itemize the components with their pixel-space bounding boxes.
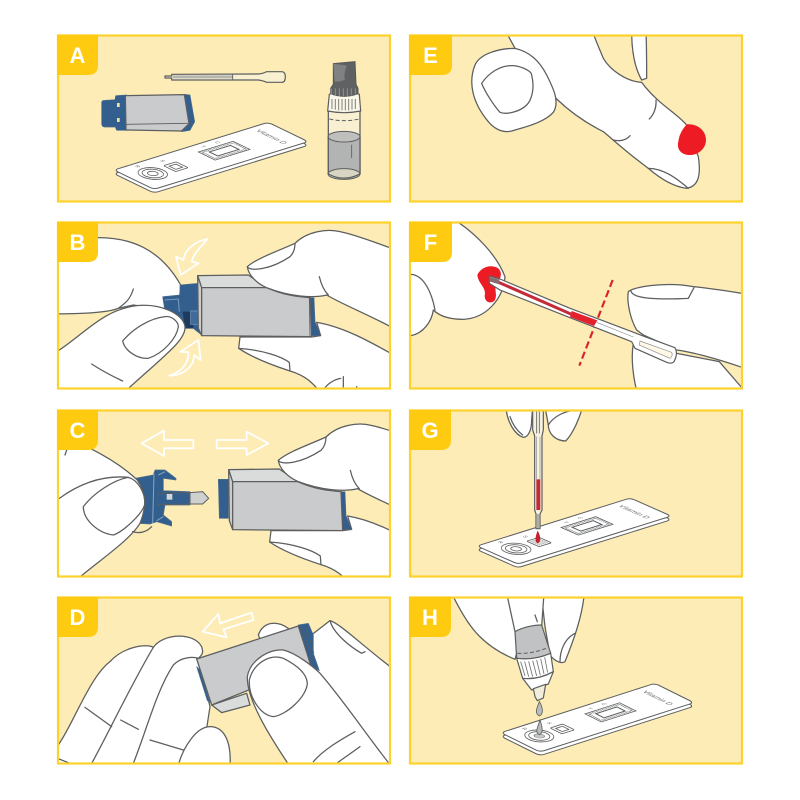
lancet body with port <box>218 469 352 531</box>
panel F: collect blood with pipette <box>408 221 744 390</box>
arrow: left <box>142 431 193 456</box>
panel H: add buffer drops <box>409 593 742 764</box>
back finger <box>258 622 289 638</box>
badge G: G <box>421 418 439 443</box>
test cassette: S <box>544 722 554 725</box>
panel E: pricked fingertip <box>409 32 742 202</box>
test cassette: T <box>561 521 569 524</box>
test cassette: C <box>212 141 222 144</box>
arrow: push left <box>203 613 253 637</box>
lancet body <box>198 275 321 337</box>
dashed cut line <box>579 280 613 366</box>
badge D <box>57 596 98 637</box>
test cassette: C <box>575 517 584 520</box>
falling drop <box>536 702 542 716</box>
icon: buffer bottle <box>328 62 361 179</box>
test cassette <box>477 498 671 568</box>
test cassette: R <box>132 165 142 168</box>
badge H <box>409 596 451 637</box>
vertical pipette <box>533 407 543 529</box>
test cassette <box>114 122 308 193</box>
badge B <box>57 222 98 262</box>
panel C: pull cap apart <box>56 409 392 578</box>
test cassette: Vitamin D <box>640 690 674 706</box>
left fingers <box>47 636 230 767</box>
badge B: B <box>70 230 85 255</box>
panel G: apply blood to cassette <box>409 407 742 576</box>
finger with blood <box>411 224 506 336</box>
panel D: lancet held against finger <box>47 596 397 770</box>
badge D: D <box>70 605 85 630</box>
badge C: C <box>70 418 86 443</box>
badge F <box>409 222 452 262</box>
pipette with blood <box>489 276 676 363</box>
fingers <box>453 593 584 663</box>
index finger <box>506 32 699 188</box>
arrow: top twist <box>176 239 207 275</box>
right hand <box>628 285 747 393</box>
panel B: twist cap off lancet <box>47 222 397 395</box>
dropper bottle <box>515 625 553 701</box>
badge A: A <box>70 43 86 68</box>
arrow: right <box>217 432 268 455</box>
upper left finger <box>47 238 181 314</box>
lancet cap and needle <box>133 470 209 526</box>
icon: pipette <box>165 72 285 82</box>
badge E: E <box>423 43 438 68</box>
lancet cap <box>163 283 202 335</box>
test cassette: T <box>585 707 593 710</box>
left hand <box>59 449 152 576</box>
badge G <box>409 410 451 450</box>
left thumb <box>59 304 186 388</box>
badge C <box>57 410 98 450</box>
test cassette: R <box>519 727 529 731</box>
icon: lancet <box>102 94 195 132</box>
blood drop <box>678 124 706 155</box>
back finger <box>632 32 647 80</box>
thumb <box>472 48 556 132</box>
blood drop <box>535 531 540 543</box>
right hand <box>239 230 397 395</box>
badge E <box>409 34 452 75</box>
fingers <box>506 412 582 442</box>
lancet body rotated <box>197 623 319 713</box>
right finger <box>312 620 389 762</box>
test cassette: S <box>157 159 167 163</box>
landing drop <box>537 720 542 735</box>
badge H: H <box>422 605 438 630</box>
test cassette <box>501 683 694 756</box>
thumb <box>247 650 392 767</box>
badge F: F <box>424 230 437 255</box>
right hand <box>269 423 389 576</box>
test cassette: C <box>599 702 608 706</box>
arrow: bottom twist <box>169 340 201 376</box>
test cassette: S <box>520 535 530 539</box>
test cassette: R <box>495 541 505 544</box>
test cassette: Vitamin D <box>253 129 289 145</box>
panel A: kit contents <box>57 34 390 202</box>
test cassette: T <box>198 146 207 149</box>
badge A <box>57 34 98 75</box>
test cassette: Vitamin D <box>616 504 652 519</box>
